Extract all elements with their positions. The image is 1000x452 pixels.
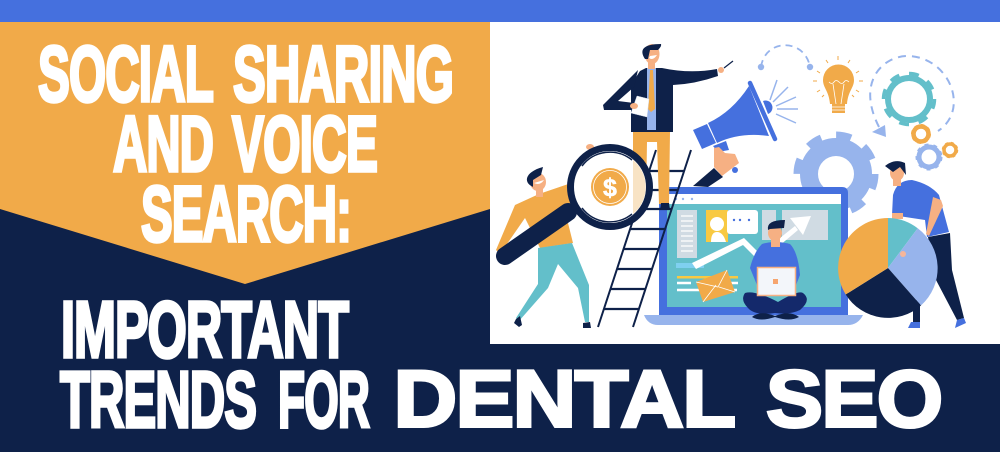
icon: teal gear cycle bbox=[870, 56, 954, 137]
grey cells bbox=[762, 210, 828, 240]
illustration panel bbox=[490, 22, 1000, 344]
envelope bbox=[696, 270, 735, 302]
icon: large background gear bbox=[797, 135, 875, 213]
heading: social sharing and voice search: AND bbox=[113, 99, 213, 188]
icon: dashed arc with dots bbox=[758, 45, 813, 70]
heading: social sharing and voice search: SHARING bbox=[233, 29, 453, 118]
heading: important trends for dental seo: TRENDS bbox=[60, 355, 256, 444]
icon: magnifying glass with dollar coin bbox=[505, 148, 650, 256]
heading: social sharing and voice search: VOICE bbox=[232, 99, 377, 188]
heading: social sharing and voice search: SEARCH: bbox=[141, 169, 351, 258]
icon: megaphone bbox=[693, 80, 798, 173]
heading: social sharing and voice search: SOCIAL bbox=[38, 29, 213, 118]
laptop with dashboard bbox=[644, 187, 863, 325]
top blue bar bbox=[0, 0, 1000, 22]
heading: important trends for dental seo: DENTAL bbox=[394, 354, 734, 444]
orange arrow banner bbox=[0, 22, 490, 284]
speech bubble bbox=[727, 210, 758, 234]
sidebar list bbox=[677, 210, 697, 258]
heading: important trends for dental seo: SEO bbox=[766, 354, 942, 444]
icon: small gears bbox=[912, 125, 958, 170]
figure: man sitting with laptop bbox=[743, 220, 807, 320]
rising arrow bbox=[692, 216, 811, 269]
icon: hand holding megaphone bbox=[693, 147, 739, 187]
icon: magnifying glass with dollar coin: $ bbox=[603, 174, 617, 202]
heading: important trends for dental seo: IMPORTANT bbox=[61, 285, 349, 374]
heading: important trends for dental seo bbox=[60, 285, 942, 444]
figure: man holding pie chart bbox=[885, 161, 966, 328]
figure: man with magnifying glass bbox=[496, 144, 594, 328]
form lines bbox=[676, 263, 738, 290]
heading: social sharing and voice search bbox=[38, 29, 453, 258]
icon: light bulb bbox=[813, 56, 863, 113]
pie chart bbox=[838, 218, 938, 318]
profile card bbox=[706, 210, 728, 242]
heading: important trends for dental seo: FOR bbox=[278, 355, 369, 444]
ladder bbox=[598, 150, 691, 327]
figure: presenter with pointer bbox=[603, 44, 733, 210]
